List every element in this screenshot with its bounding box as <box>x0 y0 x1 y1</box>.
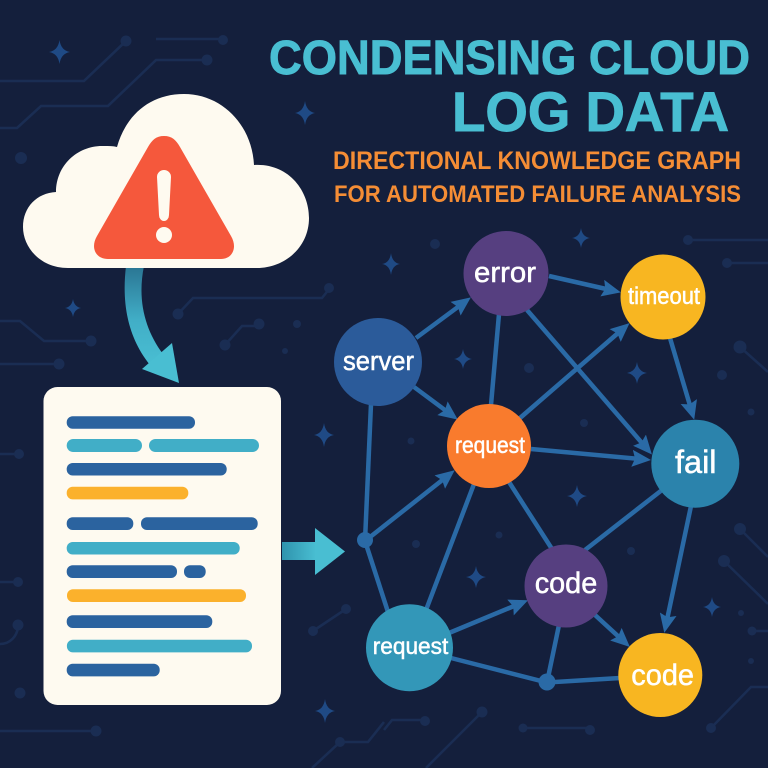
node: fail <box>651 420 739 508</box>
node: request bottom <box>366 604 453 691</box>
title <box>269 32 750 143</box>
node: code purple <box>524 544 608 628</box>
subtitle <box>333 147 741 208</box>
node: fail: fail <box>675 444 716 480</box>
graph edges <box>365 276 692 682</box>
title: CONDENSING CLOUD <box>269 32 750 85</box>
decorative stars <box>49 40 721 723</box>
log lines <box>67 416 259 676</box>
panel: log document <box>44 387 281 705</box>
icon: cloud with warning <box>23 94 309 268</box>
subtitle: FOR AUTOMATED FAILURE ANALYSIS <box>334 181 741 208</box>
node: code yellow <box>618 633 702 717</box>
arrow: log to graph <box>282 528 345 575</box>
node: code yellow: code <box>631 659 694 692</box>
node: request center <box>447 404 531 488</box>
icon: warning triangle <box>94 136 234 259</box>
node: error: error <box>474 257 536 289</box>
node: server <box>334 318 422 406</box>
node: error <box>464 231 548 316</box>
junction nodes <box>357 532 556 690</box>
subtitle: DIRECTIONAL KNOWLEDGE GRAPH <box>333 147 741 175</box>
node: request center: request <box>455 432 526 458</box>
node: timeout <box>620 254 706 340</box>
node: timeout: timeout <box>628 283 700 310</box>
title: LOG DATA <box>452 80 729 143</box>
node: server: server <box>343 346 414 376</box>
node: code purple: code <box>535 567 597 600</box>
arrow: cloud to log <box>125 266 179 383</box>
node: request bottom: request <box>373 633 449 659</box>
